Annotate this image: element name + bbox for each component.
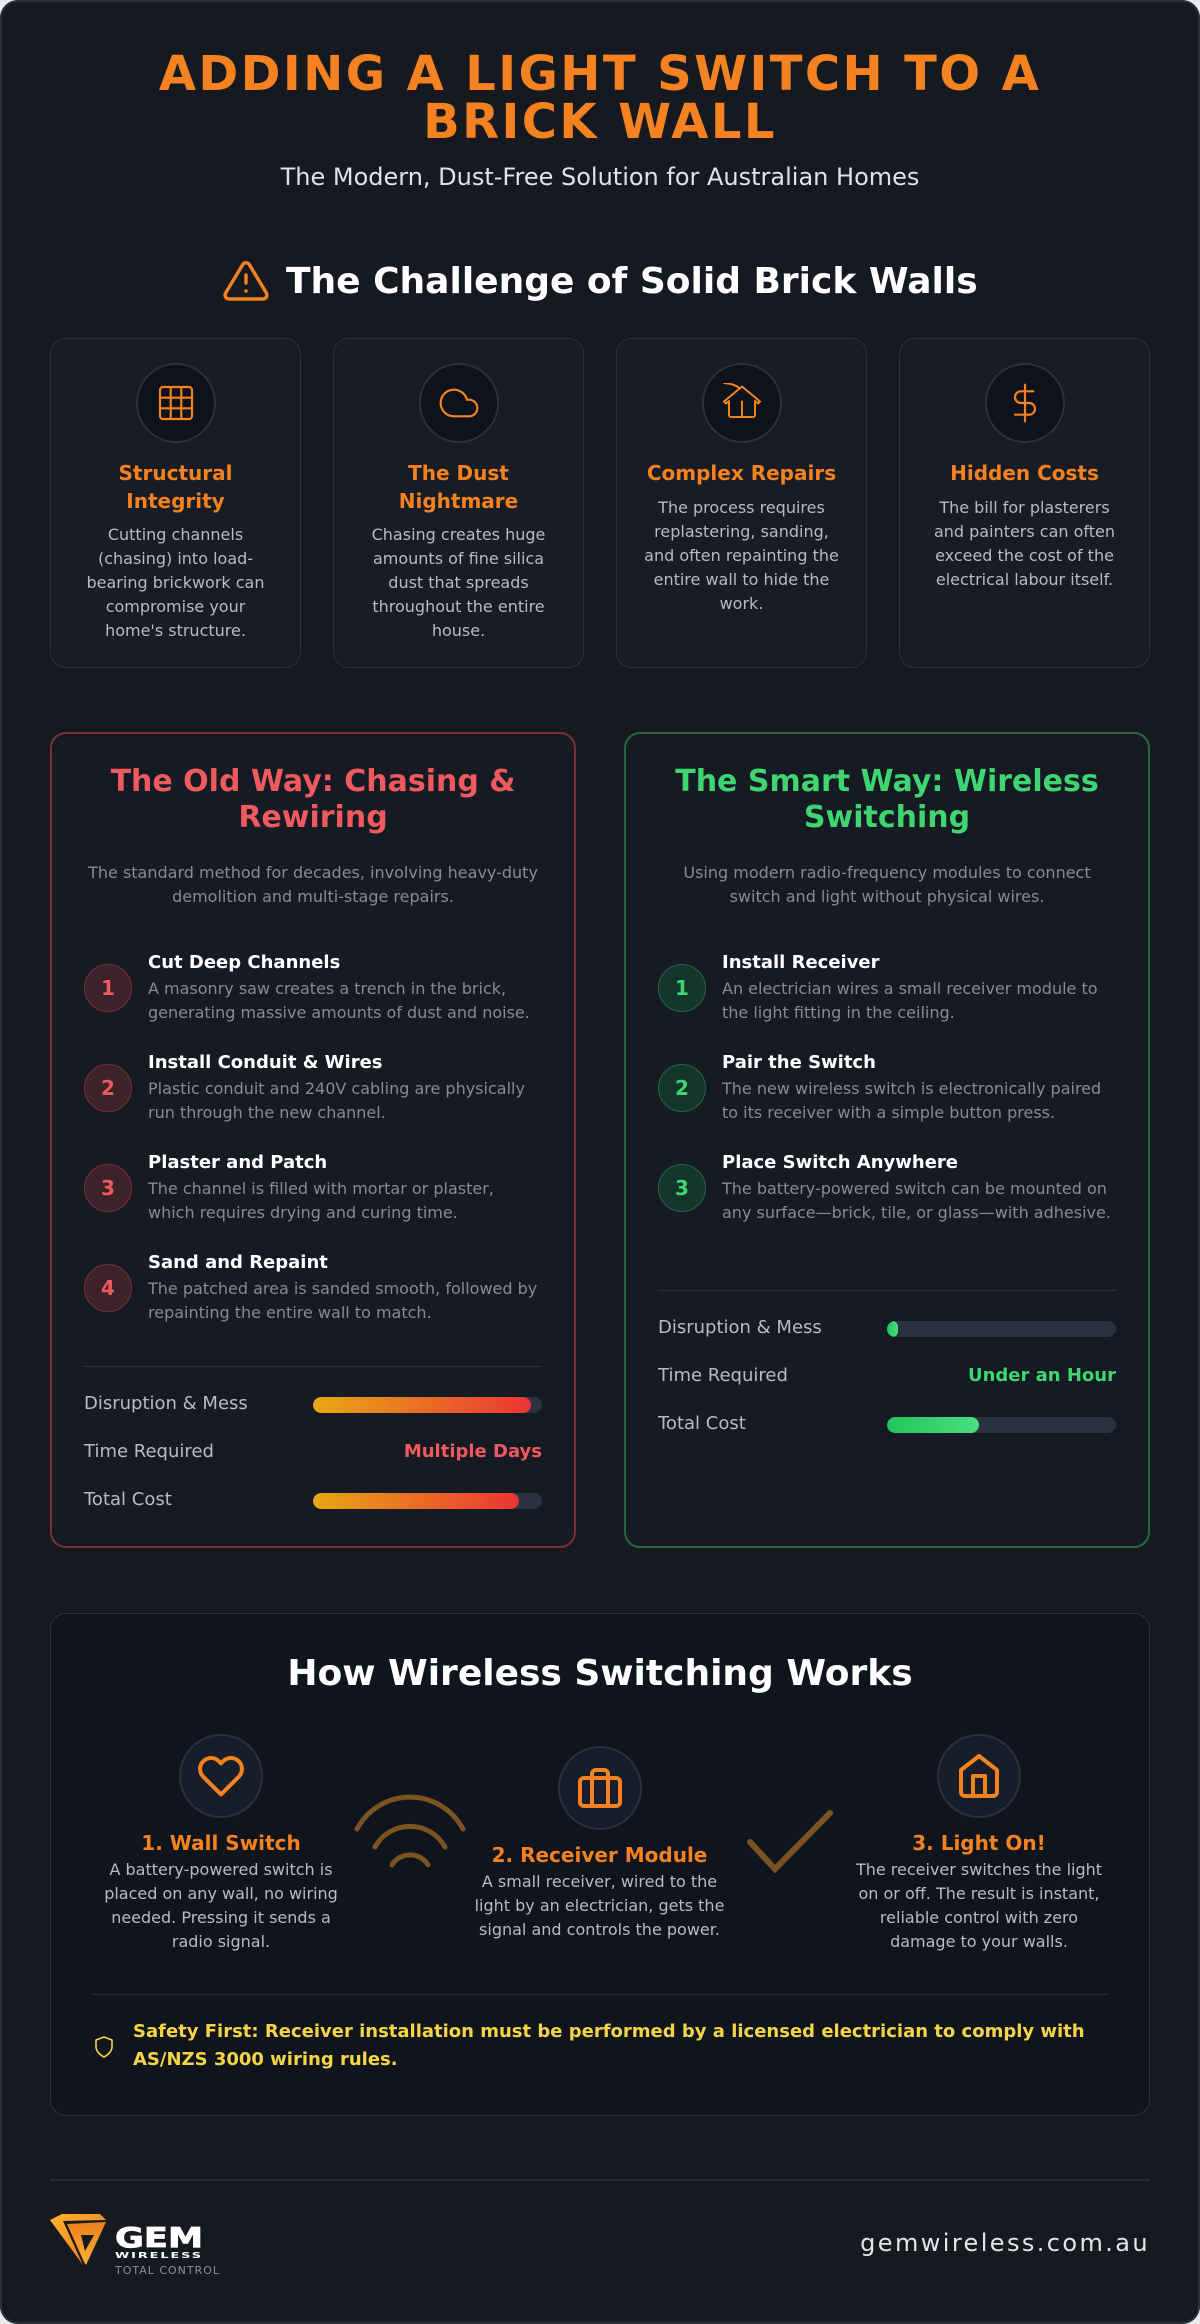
panel heading: Rewiring (238, 800, 388, 835)
callout: safety first: Safety First: Receiver installation must be performed by a licensed electrician to comply with (133, 2021, 1085, 2042)
card text: Cutting channels (108, 525, 243, 544)
icon: warning triangle (223, 261, 269, 301)
metric bar: disruption 5% (887, 1321, 1116, 1337)
icon: home (937, 1734, 1021, 1818)
logo mark (50, 2214, 106, 2265)
step text: The channel is filled with mortar or plaster, (148, 1179, 494, 1198)
card text: replastering, sanding, (654, 522, 829, 541)
step heading: Plaster and Patch (148, 1152, 327, 1173)
panel intro: switch and light without physical wires. (730, 887, 1044, 906)
step text (722, 1079, 1101, 1122)
number badge (84, 1064, 132, 1112)
panel heading: Switching (804, 800, 970, 835)
card title: The Dust (408, 461, 509, 485)
step text: The battery-powered switch can be mounted on (722, 1179, 1107, 1198)
card text (372, 525, 545, 640)
number badge: 3 (101, 1176, 115, 1200)
step text: on or off. The result is instant, (858, 1884, 1100, 1903)
card text: and painters can often (934, 522, 1115, 541)
metric label: disruption: Disruption & Mess (658, 1317, 822, 1338)
card text (644, 498, 839, 613)
step text: repainting the entire wall to match. (148, 1303, 432, 1322)
logo tagline: TOTAL CONTROL (114, 2264, 220, 2277)
step text (148, 1279, 537, 1322)
step text: reliable control with zero (880, 1908, 1078, 1927)
panel: hidden costs (899, 338, 1150, 668)
icon: brick grid (136, 363, 216, 443)
metric label: disruption: Disruption & Mess (84, 1393, 248, 1414)
panel intro: The standard method for decades, involving heavy-duty (88, 863, 538, 882)
metric bar: cost 90% (313, 1493, 542, 1509)
logo: gem wireless (50, 2214, 220, 2277)
step text (475, 1872, 724, 1939)
panel: complex repairs (616, 338, 867, 668)
panel: dust nightmare (333, 338, 584, 668)
step: light on (856, 1734, 1102, 1951)
icon: cloud (419, 363, 499, 443)
step heading: Place Switch Anywhere (722, 1152, 958, 1173)
panel intro (683, 863, 1091, 906)
step text: The new wireless switch is electronically paired (722, 1079, 1101, 1098)
step text: light by an electrician, gets the (475, 1896, 724, 1915)
step 3 (84, 1152, 494, 1222)
step text (722, 1179, 1111, 1222)
step text (148, 1179, 494, 1222)
number badge: 1 (101, 976, 115, 1000)
step 2 (84, 1052, 525, 1122)
step text (148, 979, 530, 1022)
logo subword: WIRELESS (115, 2251, 203, 2260)
step title: 1. Wall Switch (141, 1831, 301, 1855)
card text: dust that spreads (388, 573, 529, 592)
metric label: time: Time Required (658, 1365, 788, 1386)
step text: The patched area is sanded smooth, followed by (148, 1279, 537, 1298)
card text: The bill for plasterers (939, 498, 1110, 517)
step text: Plastic conduit and 240V cabling are physically (148, 1079, 525, 1098)
panel intro: demolition and multi-stage repairs. (172, 887, 454, 906)
step text (148, 1079, 525, 1122)
panel: how wireless switching works (50, 1613, 1150, 2116)
metric label: time: Time Required (84, 1441, 214, 1462)
step heading: Pair the Switch (722, 1052, 876, 1073)
icon: shield (95, 2036, 113, 2058)
number badge: 2 (101, 1076, 115, 1100)
icon: house with pick (702, 363, 782, 443)
step heading: Install Conduit & Wires (148, 1052, 383, 1073)
step text: needed. Pressing it sends a (111, 1908, 331, 1927)
subtitle: The Modern, Dust-Free Solution for Australian Homes (281, 163, 919, 191)
card text: throughout the entire (372, 597, 545, 616)
step text (856, 1860, 1102, 1951)
step: receiver module (475, 1746, 724, 1939)
panel intro (88, 863, 538, 906)
card text (934, 498, 1115, 589)
number badge: 2 (675, 1076, 689, 1100)
number badge (84, 1164, 132, 1212)
callout: safety first (133, 2021, 1085, 2070)
panel: structural integrity (50, 338, 301, 668)
step text (722, 979, 1098, 1022)
heading: the challenge: The Challenge of Solid Brick Walls (286, 261, 978, 302)
heading: how it works: How Wireless Switching Works (287, 1653, 913, 1694)
logo wordmark: GEM (115, 2221, 203, 2254)
step text: placed on any wall, no wiring (104, 1884, 338, 1903)
metric value: under an hour: Under an Hour (968, 1365, 1116, 1386)
step text: to its receiver with a simple button press. (722, 1103, 1055, 1122)
card title: Nightmare (399, 489, 518, 513)
arrow: check mark (747, 1810, 833, 1874)
metric label: cost: Total Cost (84, 1489, 172, 1510)
step text: which requires drying and curing time. (148, 1203, 458, 1222)
number badge (658, 964, 706, 1012)
number badge (84, 964, 132, 1012)
step 3 (658, 1152, 1111, 1222)
step 4 (84, 1252, 537, 1322)
card title (399, 461, 518, 513)
panel heading: The Old Way: Chasing & (111, 764, 515, 799)
card text: work. (720, 594, 763, 613)
website url: gemwireless.com.au (860, 2229, 1150, 2257)
icon: briefcase (558, 1746, 642, 1830)
step heading: Sand and Repaint (148, 1252, 328, 1273)
card title: Complex Repairs (647, 461, 836, 485)
card text: (chasing) into load- (98, 549, 253, 568)
panel heading (675, 764, 1099, 835)
step text: A masonry saw creates a trench in the brick, (148, 979, 506, 998)
panel: the smart way (624, 732, 1150, 1548)
step text: radio signal. (172, 1932, 270, 1951)
title: ADDING A LIGHT SWITCH TO A (159, 46, 1041, 102)
metric bar: cost 40% (887, 1417, 1116, 1433)
step text: A small receiver, wired to the (482, 1872, 717, 1891)
title (159, 46, 1041, 150)
number badge: 3 (675, 1176, 689, 1200)
step text: An electrician wires a small receiver module to (722, 979, 1098, 998)
step title: 3. Light On! (912, 1831, 1046, 1855)
card title: Hidden Costs (950, 461, 1099, 485)
step text: A battery-powered switch is (109, 1860, 333, 1879)
card title: Integrity (126, 489, 225, 513)
step text: run through the new channel. (148, 1103, 386, 1122)
card text: Chasing creates huge (372, 525, 545, 544)
step text (104, 1860, 338, 1951)
number badge: 1 (675, 976, 689, 1000)
card text: home's structure. (105, 621, 246, 640)
panel heading: The Smart Way: Wireless (675, 764, 1099, 799)
number badge (658, 1064, 706, 1112)
step: wall switch (104, 1734, 338, 1951)
step 1 (84, 952, 530, 1022)
card text: house. (432, 621, 485, 640)
step 1 (658, 952, 1098, 1022)
card text: amounts of fine silica (373, 549, 544, 568)
card title (119, 461, 232, 513)
card text (86, 525, 264, 640)
panel intro: Using modern radio-frequency modules to connect (683, 863, 1091, 882)
number badge (84, 1264, 132, 1312)
metric label: cost: Total Cost (658, 1413, 746, 1434)
step text: the light fitting in the ceiling. (722, 1003, 955, 1022)
arrow: wifi signal (354, 1794, 466, 1868)
step 2 (658, 1052, 1101, 1122)
panel: the old way (50, 732, 576, 1548)
step text: damage to your walls. (890, 1932, 1068, 1951)
title: BRICK WALL (423, 94, 777, 150)
callout: safety first: AS/NZS 3000 wiring rules. (133, 2049, 398, 2070)
number badge: 4 (101, 1276, 115, 1300)
card text: The process requires (658, 498, 825, 517)
card text: electrical labour itself. (936, 570, 1113, 589)
step text: The receiver switches the light (856, 1860, 1102, 1879)
card title: Structural (119, 461, 232, 485)
icon: heart (179, 1734, 263, 1818)
metric bar: disruption 95% (313, 1397, 542, 1413)
step heading: Install Receiver (722, 952, 880, 973)
step title: 2. Receiver Module (492, 1843, 707, 1867)
panel heading (110, 764, 515, 835)
step heading: Cut Deep Channels (148, 952, 340, 973)
step text: signal and controls the power. (479, 1920, 720, 1939)
number badge (658, 1164, 706, 1212)
metric value: multiple days: Multiple Days (404, 1441, 542, 1462)
icon: dollar (985, 363, 1065, 443)
card text: exceed the cost of the (935, 546, 1114, 565)
card text: bearing brickwork can (86, 573, 264, 592)
step text: any surface—brick, tile, or glass—with adhesive. (722, 1203, 1111, 1222)
card text: compromise your (106, 597, 245, 616)
step text: generating massive amounts of dust and noise. (148, 1003, 530, 1022)
card text: entire wall to hide the (654, 570, 829, 589)
card text: and often repainting the (644, 546, 839, 565)
